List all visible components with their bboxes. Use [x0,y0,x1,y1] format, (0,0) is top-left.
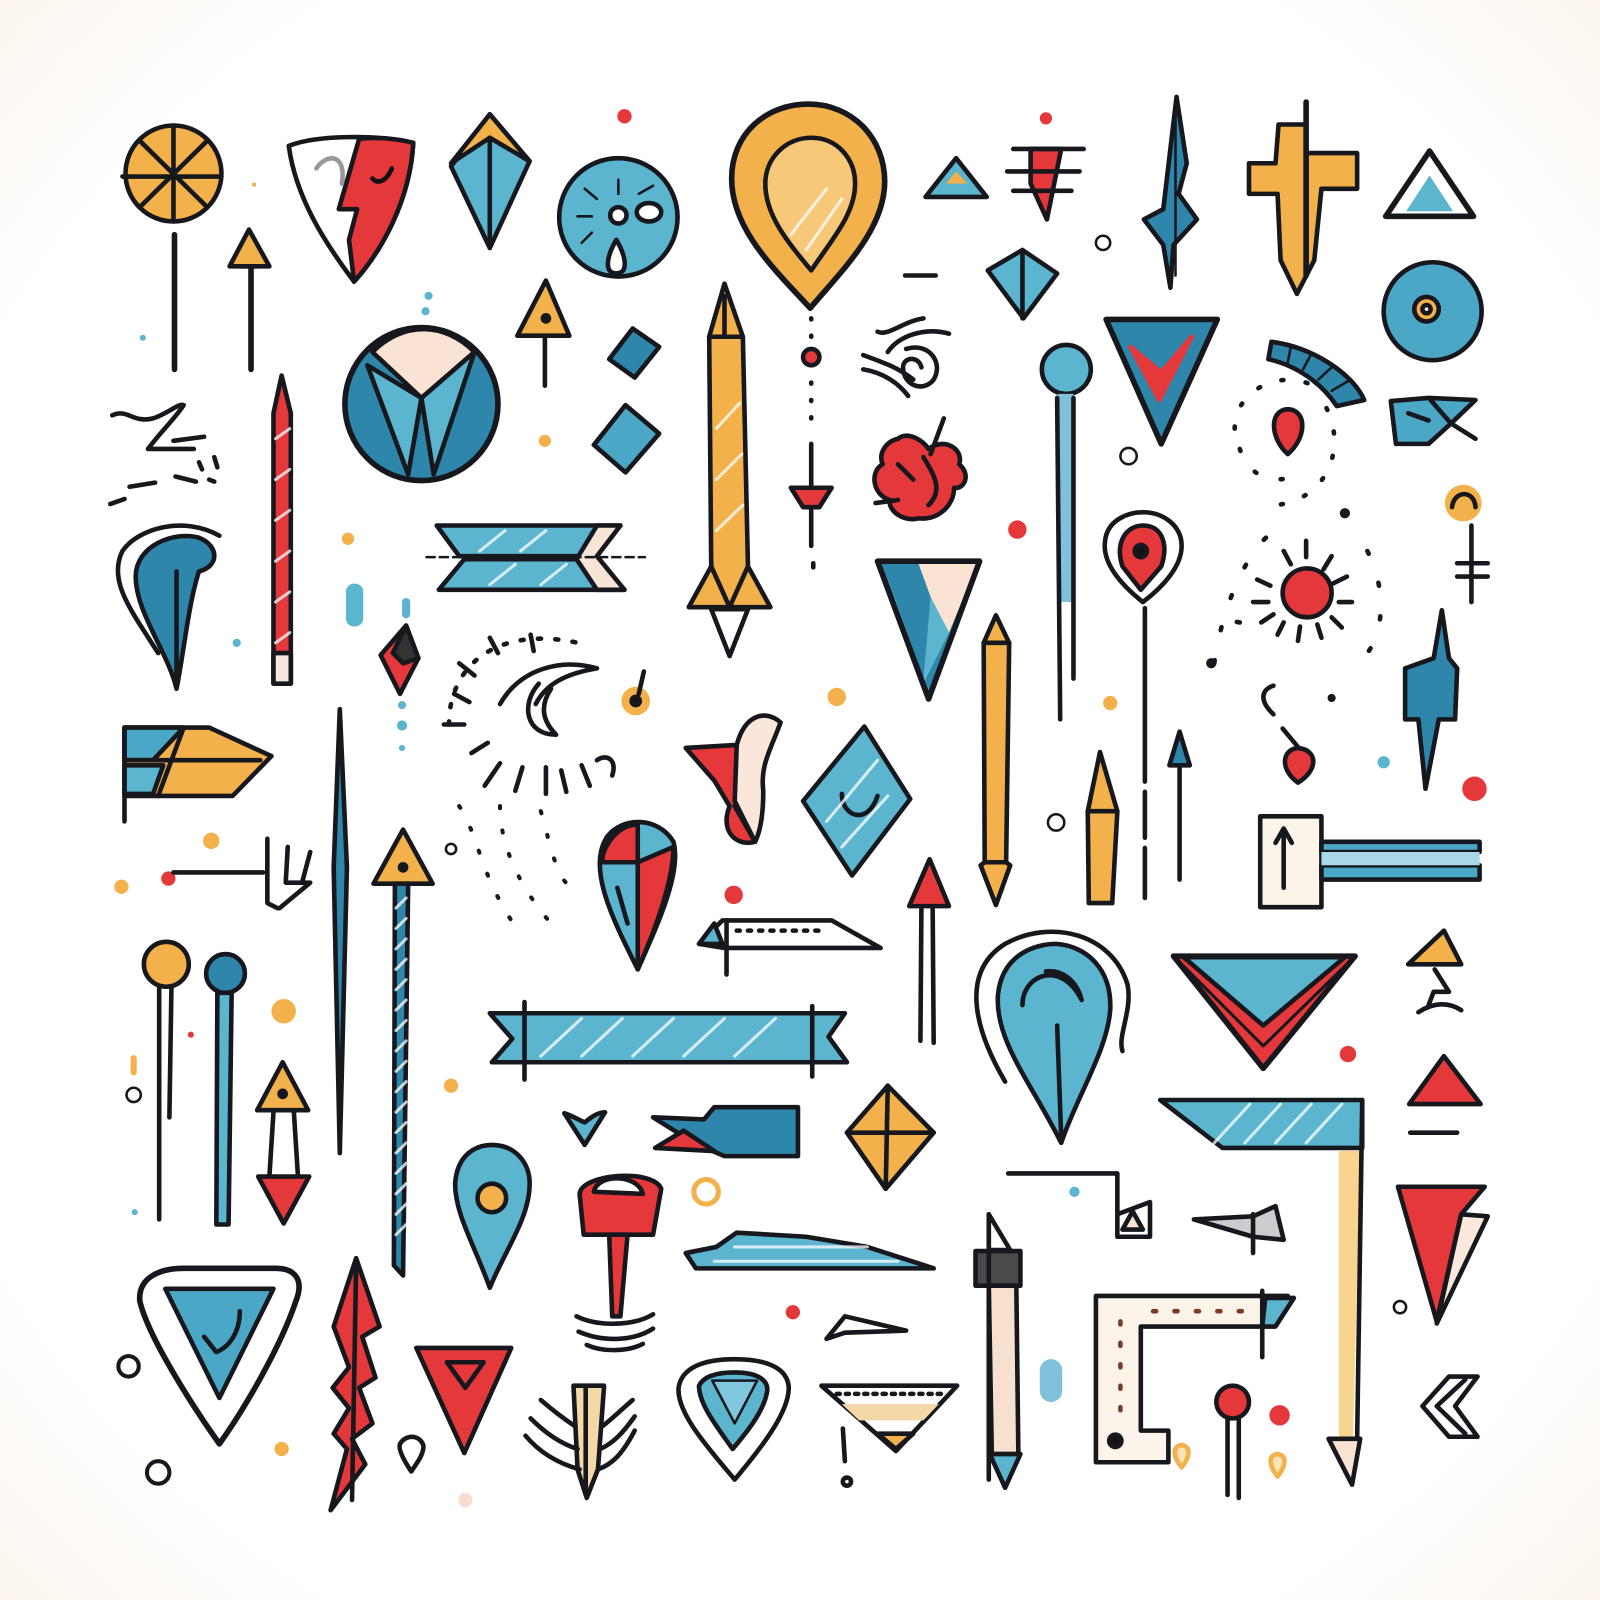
icon: orange triangle hatched arrow [373,830,433,1276]
icon: blue and orange arrow flag [124,728,271,821]
icon: red and cream folded triangle [1398,1187,1488,1323]
icon: inverted blue triangle with cream corner [878,561,980,699]
icon: red pin [1216,1386,1249,1498]
icon: tall cream pencil with dark cap [976,1214,1020,1488]
icon: orange droplets [1175,1445,1284,1477]
icon: orange diamond cross [847,1086,934,1189]
icon: blue and red kite [600,822,675,969]
icon: flat blue blade arrow [686,1233,934,1268]
icon: two pins, orange and blue [144,942,245,1224]
icon: blue pin with long needle [1042,345,1091,719]
icon: tall red pencil [273,376,291,684]
icon: cream corner bracket with dots [1096,1291,1294,1462]
icon: sun with red center [1209,531,1381,663]
icon: long blue ribbon banner [490,1002,847,1080]
icon: double chevron left [1422,1377,1478,1437]
icon: blue double chevron banner [427,526,645,590]
icon: bird scribble and dashes [110,405,217,504]
icon: blue thin arrow [1169,732,1190,880]
icon: orange pin with cross stem [1445,485,1488,602]
icon: orange ring [694,1180,718,1204]
icon: small orange arrow [230,230,269,369]
icon: blue four point star arrow [1405,610,1457,789]
decoration: dotted spray [459,806,571,934]
icon: blue spiky arrow [1144,97,1197,288]
icon: blue kite with orange cap [451,114,530,248]
icon: blue target circle [1384,262,1482,360]
icon: red triangle with dash [1409,1056,1481,1133]
icon: orange cross dagger [1249,102,1357,294]
icon: small blue heart [564,1112,605,1145]
icon: red triangle needle [909,859,949,1043]
icon: small blue mountain triangle [926,158,987,197]
decoration: spark dots right [1206,508,1350,702]
decoration: small rings [118,236,1406,1484]
icon: card with up arrow and striped bar [1260,816,1480,907]
icon: fingerprint swirl [863,318,949,396]
icon: inverted red and blue chevron triangle [1173,956,1355,1068]
icon: striped inverted triangle [821,1386,957,1486]
icon: outlined blue triangle [1386,151,1473,216]
icon: long orange pencil arrow [689,284,770,656]
icon: large orange map pin [732,104,885,308]
icon: blue diamond with hook [803,727,910,876]
icon: blue arrow tag [1391,398,1476,444]
icon: red and white zigzag shape [686,716,781,843]
icon: narrow dotted blade arrow [699,920,881,974]
icon: feathered arrow [526,1386,635,1498]
icon: small diamond with red tip [381,626,418,694]
icon: blue mushroom arrowhead [118,526,219,689]
icon: small dark blade arrow [1194,1206,1284,1253]
icon: blue map pin [455,1145,530,1288]
icon: small blue kite [905,250,1057,318]
icon: dotted red target with stem [791,318,832,567]
icon: outlined blue rounded triangle [140,1268,299,1444]
icon: small white arrowhead [827,1316,906,1339]
icon: connector line with small box [1008,1173,1150,1237]
icon: large blue faceted circle [345,328,498,481]
icon: blue and red chevron triangle [1106,319,1217,444]
icon: hook and red heart [1263,686,1313,783]
icon: red dot squiggle arrow [161,839,310,908]
icon: blue bars [594,329,659,472]
icon: blue hatched corner banner with orange shaft [1160,1100,1362,1485]
icon: red horseshoe marker [1105,512,1182,898]
icon: big blue teardrop with arcs [976,932,1129,1143]
icon: red flower burst [874,418,966,519]
icon: triangle arrow with red base [257,1062,309,1223]
icon: orange dot with stem [621,671,650,715]
icon: tall blue needle [334,709,347,1153]
icon: red barbed marker [1007,149,1084,219]
icon: orange triangle with squiggle [1408,931,1461,1012]
icon: blue rounded triangle badge [678,1359,789,1480]
icon: blue torn arrow [653,1107,798,1156]
icon: red inverted triangle [416,1348,511,1453]
icon: split shield red and white [289,137,413,282]
icon: small ring pin [400,1437,423,1471]
icon: orange wheel lollipop [122,126,221,369]
icon: blue dial circle [559,158,678,277]
icon: crescent sun with rays [444,635,614,794]
decoration: scattered dots, top [114,109,1487,1507]
icon: small orange triangle arrow [517,281,569,386]
icon: red stand with waves [577,1176,661,1350]
icon: red barbed spear [331,1258,380,1510]
icon: tall orange pencil [981,615,1010,905]
icon: red drop with sparks [1235,380,1334,505]
icon: small orange rocket [1088,752,1117,903]
icon: blue arc gauge [1268,342,1364,406]
